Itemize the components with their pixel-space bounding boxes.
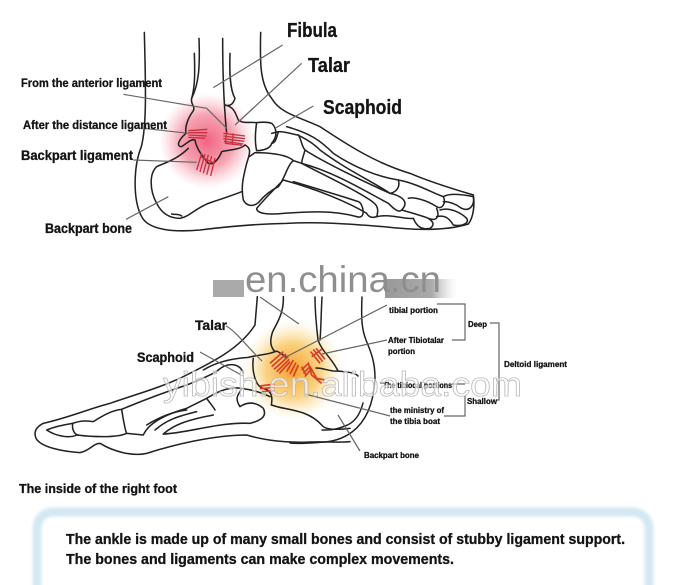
label: Backpart ligament: Backpart ligament <box>21 147 133 163</box>
label: Backpart bone: Backpart bone <box>45 221 132 236</box>
glow: orange ankle pain area <box>243 320 343 420</box>
label: Talar: Talar <box>195 318 228 333</box>
label: Backpart bone: Backpart bone <box>364 450 419 460</box>
callout frame <box>37 512 649 585</box>
label: Talar: Talar <box>308 55 350 77</box>
watermark: en.china.cn: en.china.cn <box>245 259 441 300</box>
label: After Tibiotalar portion: portion <box>388 346 415 356</box>
callout panel <box>37 512 649 585</box>
label: After Tibiotalar portion <box>388 335 445 356</box>
leader lines with brackets <box>200 297 499 451</box>
ligaments: orange-red fibres <box>260 348 325 392</box>
callout text <box>66 532 625 568</box>
label: Scaphoid: Scaphoid <box>323 97 402 119</box>
label: After the distance ligament: After the distance ligament <box>23 120 167 132</box>
glow: red ankle pain area <box>159 93 255 189</box>
diagram: outside of the foot <box>21 20 474 236</box>
ligaments: red fibres <box>188 129 245 176</box>
callout text: The bones and ligaments can make complex movements. <box>66 552 454 568</box>
label: Scaphoid: Scaphoid <box>137 350 194 365</box>
foot skeleton outline: outside view <box>135 32 474 231</box>
watermark smears <box>213 279 457 298</box>
label: After Tibiotalar portion: After Tibiotalar <box>388 335 445 345</box>
caption: The inside of the right foot: The inside of the right foot <box>19 481 178 496</box>
foot skeleton outline: inside view <box>35 297 350 454</box>
label: tibial portion: tibial portion <box>389 305 438 315</box>
callout text: The ankle is made up of many small bones and consist of stubby ligament support. <box>66 532 625 548</box>
label: From the anterior ligament: From the anterior ligament <box>21 78 162 90</box>
label: Tibiocalcaneal portions: The tibiocal portions <box>383 380 452 390</box>
label: the ministry of the tibia boat <box>390 405 444 426</box>
label: Fibula: Fibula <box>287 20 338 42</box>
label: the ministry of the tibia boat: the ministry of <box>390 405 444 415</box>
watermark: yibish.en.alibaba.com: yibish.en.alibaba.com <box>163 366 522 404</box>
label: Shallow: Shallow <box>467 396 497 406</box>
leader lines <box>123 45 313 219</box>
label: the ministry of the tibia boat: the tibia boat <box>390 416 440 426</box>
label: Deep: Deep <box>468 319 487 329</box>
foot skeleton: heel and leg lines <box>290 297 375 443</box>
label: Deltoid ligament: Deltoid ligament <box>504 359 567 369</box>
diagram: inside of the right foot <box>19 297 567 496</box>
